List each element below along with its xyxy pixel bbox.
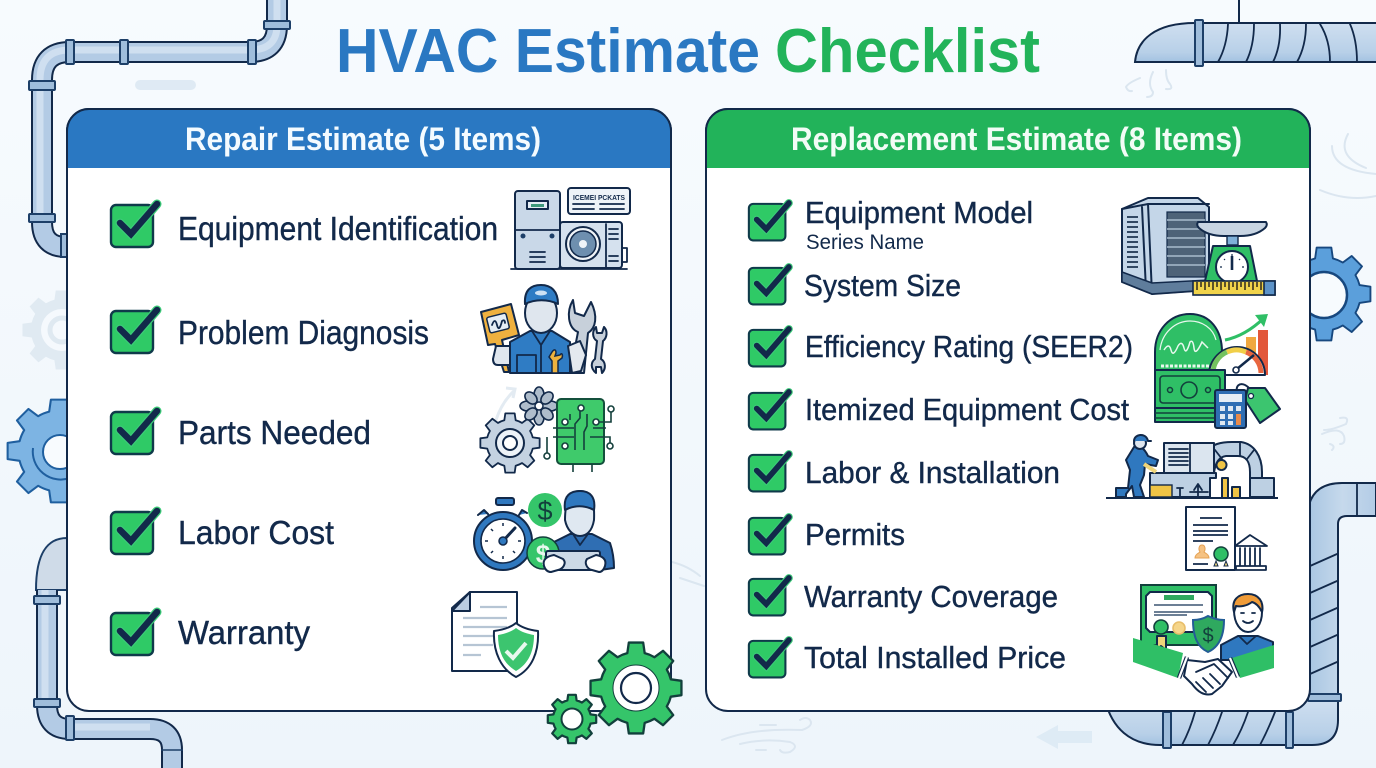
icon: parts gear fan circuit [480, 387, 614, 473]
panel header: replacement: Replacement Estimate (8 Items) [791, 121, 1242, 157]
icon: equipment units [511, 188, 630, 269]
item: Total Installed Price: Total Installed Price [804, 640, 1066, 675]
item: Equipment Model: Equipment Model [805, 195, 1033, 230]
icon: stopwatch money technician [474, 491, 614, 572]
item: Efficiency Rating (SEER2): Efficiency Rating (SEER2) [805, 329, 1133, 364]
icon: technician with meter and wrenches [481, 285, 607, 373]
item: Equipment Model [749, 195, 1033, 254]
title: HVAC Estimate [336, 17, 760, 86]
item: Warranty [111, 612, 310, 655]
panel header: repair: Repair Estimate (5 Items) [185, 121, 541, 157]
title: Checklist [775, 17, 1040, 86]
item: Equipment Identification [111, 204, 498, 247]
item: Problem Diagnosis: Problem Diagnosis [178, 314, 429, 351]
item: Permits: Permits [805, 517, 905, 552]
icon: stopwatch money technician: $ [537, 496, 553, 526]
item: Labor & Installation: Labor & Installation [805, 455, 1060, 490]
item: Labor Cost [111, 511, 334, 554]
item: Parts Needed [111, 411, 371, 454]
item: Labor Cost: Labor Cost [178, 514, 334, 551]
title [336, 17, 1040, 86]
gear: faint left [22, 290, 102, 370]
gear: large green [591, 643, 681, 733]
icon: stopwatch money technician: $ [536, 539, 551, 569]
panel: repair estimate [67, 109, 671, 711]
gear: blue left [8, 400, 110, 502]
item: Warranty Coverage: Warranty Coverage [804, 579, 1058, 614]
icon: warranty certificate and handshake: $ [1202, 625, 1214, 647]
icon: permit document and building [1186, 507, 1267, 570]
item: Parts Needed: Parts Needed [178, 414, 371, 451]
gear: blue right [1278, 248, 1370, 340]
icon: efficiency label, money and calculator [1155, 314, 1280, 428]
duct: top right [1135, 0, 1376, 66]
item: Permits [749, 517, 905, 554]
panel header: replacement [706, 109, 1310, 168]
icon: equipment units: ICEMEI PCKATS [573, 193, 625, 202]
item: Equipment Model: Series Name [806, 231, 924, 254]
pipe: top left [29, 0, 290, 257]
item: Warranty: Warranty [178, 614, 310, 651]
icon: warranty certificate and handshake [1133, 585, 1274, 695]
pipe: bottom left [34, 538, 183, 768]
panel: replacement estimate [706, 109, 1310, 711]
icon: AC unit with scale and tape [1122, 198, 1275, 295]
item: System Size [749, 267, 961, 304]
icon: worker installing ducts [1106, 435, 1278, 498]
item: System Size: System Size [804, 268, 961, 303]
item: Problem Diagnosis [111, 310, 429, 353]
item: Itemized Equipment Cost: Itemized Equipment Cost [805, 392, 1129, 427]
duct: bottom right [1105, 483, 1376, 748]
icon: warranty document with shield [452, 592, 538, 677]
item: Equipment Identification: Equipment Identification [178, 210, 498, 247]
gear: small green [548, 695, 596, 743]
panel header: repair [67, 109, 671, 168]
